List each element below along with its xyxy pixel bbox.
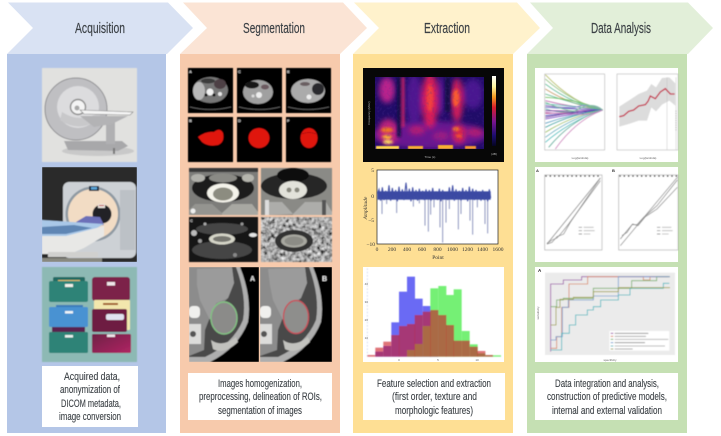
image grid: axial CT slices and red tumour masks: F xyxy=(287,118,290,123)
caption: acquisition: DICOM metadata, xyxy=(61,398,121,410)
chart: amplitude signal line plot: 200 xyxy=(388,247,396,253)
chart: overlapping histogram: 20 xyxy=(365,318,368,322)
chart: LASSO coefficient paths and cross-validation: Log(lambda) xyxy=(640,156,656,160)
column: Acquisition xyxy=(7,2,193,433)
heading arrow: Data Analysis xyxy=(527,2,713,54)
cross-validation error band xyxy=(619,77,675,127)
image: CT scanner illustration xyxy=(42,68,137,162)
chart: amplitude signal line plot: −5 xyxy=(368,218,374,224)
chart: ROC curves with legend: A xyxy=(538,268,542,273)
heading arrow: Segmentation xyxy=(180,2,367,54)
caption: data analysis: Data integration and analysis, xyxy=(555,378,659,390)
column: Extraction xyxy=(353,2,540,433)
chart: overlapping histogram: 10 xyxy=(365,336,368,340)
column: Data Analysis xyxy=(527,2,713,433)
chart: amplitude signal line plot: 400 xyxy=(403,247,411,253)
heading arrow: Acquisition: Acquisition xyxy=(75,21,125,37)
caption: data analysis xyxy=(535,373,678,420)
heading arrow: Segmentation: Segmentation xyxy=(243,21,305,37)
image: abdominal CT with red tumour contour: B xyxy=(322,276,327,283)
chart: spectrogram heat map xyxy=(363,68,504,162)
image grid: axial CT slices and red tumour masks: B xyxy=(189,118,192,123)
image grid: cervical spine MRI xyxy=(189,168,332,262)
chart: overlapping histogram: 30 xyxy=(365,300,368,304)
chart: spectrogram heat map: (dB) xyxy=(491,152,497,156)
caption: extraction: morphologic features) xyxy=(395,405,473,417)
image grid: axial CT slices and red tumour masks: E xyxy=(287,69,290,74)
image grid: axial CT slices and red tumour masks xyxy=(188,68,331,162)
chart: amplitude signal line plot: Amplitude xyxy=(363,196,369,220)
coefficient paths xyxy=(545,75,603,149)
column: Segmentation xyxy=(180,2,367,433)
caption: acquisition: image conversion xyxy=(59,411,121,423)
chart: calibration curves: B xyxy=(612,168,615,173)
caption: segmentation: preprocessing, delineation of ROIs, xyxy=(199,391,322,403)
chart: amplitude signal line plot: 1400 xyxy=(477,247,488,253)
image grid: axial CT slices and red tumour masks: A xyxy=(189,69,192,74)
caption: data analysis: construction of predictive models, xyxy=(547,391,667,403)
chart: ROC curves with legend: sensitivity xyxy=(536,306,540,320)
panel: segmentation background xyxy=(180,54,340,433)
caption: acquisition: anonymization of xyxy=(60,384,121,396)
caption: extraction xyxy=(363,373,505,420)
panel: data analysis background xyxy=(527,54,687,433)
chart: amplitude signal line plot: 800 xyxy=(433,247,442,253)
green bars xyxy=(407,286,501,357)
image: abdominal CT with red tumour contour xyxy=(260,267,332,362)
icon: DICOM file folders xyxy=(42,267,137,362)
caption: segmentation xyxy=(188,373,332,420)
chart: overlapping histogram xyxy=(363,267,504,362)
chart: amplitude signal line plot: 0 xyxy=(376,247,379,253)
image: abdominal CT with green tumour contour: A xyxy=(250,276,255,283)
caption: acquisition xyxy=(42,366,138,427)
blue bars xyxy=(375,277,438,357)
colour scale xyxy=(492,76,496,146)
caption: segmentation: segmentation of images xyxy=(218,405,302,417)
caption: data analysis: internal and external validation xyxy=(552,405,662,417)
image: patient CT gantry photo xyxy=(42,167,137,262)
chart: amplitude signal line plot: 1200 xyxy=(462,247,473,253)
chart: spectrogram heat map: Frequency (MHz) xyxy=(367,101,371,125)
chart: amplitude signal line plot: 0 xyxy=(371,194,374,200)
chart: amplitude signal line plot: 600 xyxy=(418,247,426,253)
chart: LASSO coefficient paths and cross-validation xyxy=(535,68,678,162)
chart: overlapping histogram: 5 xyxy=(437,358,439,362)
chart: amplitude signal line plot: −10 xyxy=(366,242,375,248)
chart: overlapping histogram: 40 xyxy=(365,282,368,286)
chart: spectrogram heat map: Time (s) xyxy=(425,155,435,159)
heading arrow: Extraction xyxy=(353,2,540,54)
image grid: cervical spine MRI: D xyxy=(263,218,266,223)
red bars xyxy=(367,310,493,357)
panel: acquisition background xyxy=(7,54,166,433)
caption: extraction: (first order, texture and xyxy=(392,391,477,403)
chart: amplitude signal line plot: Point xyxy=(432,255,444,261)
axis labels: 5 xyxy=(371,168,374,174)
chart: calibration curves: A xyxy=(536,168,539,173)
heading arrow: Data Analysis: Data Analysis xyxy=(591,21,651,37)
image: abdominal CT with green tumour contour xyxy=(189,267,259,362)
chart: amplitude signal line plot: 1000 xyxy=(447,247,458,253)
caption: extraction: Feature selection and extraction xyxy=(377,378,491,390)
chart: amplitude signal line plot xyxy=(363,168,504,261)
image grid: cervical spine MRI: C xyxy=(190,218,193,223)
chart: ROC curves with legend xyxy=(535,267,678,362)
chart: overlapping histogram: 10 xyxy=(475,358,479,362)
chart: ROC curves with legend: specificity xyxy=(603,358,617,362)
image grid: axial CT slices and red tumour masks: C xyxy=(238,69,241,74)
panel: extraction background xyxy=(353,54,513,433)
heading arrow: Acquisition xyxy=(7,2,193,54)
chart: amplitude signal line plot: 1600 xyxy=(492,247,504,253)
chart: calibration curves xyxy=(535,167,678,262)
caption: acquisition: Acquired data, xyxy=(64,371,120,383)
chart: LASSO coefficient paths and cross-validation: Log(lambda) xyxy=(572,156,588,160)
caption: segmentation: Images homogenization, xyxy=(218,378,302,390)
chart: overlapping histogram: 0 xyxy=(398,358,400,362)
heading arrow: Extraction: Extraction xyxy=(424,21,470,37)
image grid: axial CT slices and red tumour masks: D xyxy=(238,118,241,123)
